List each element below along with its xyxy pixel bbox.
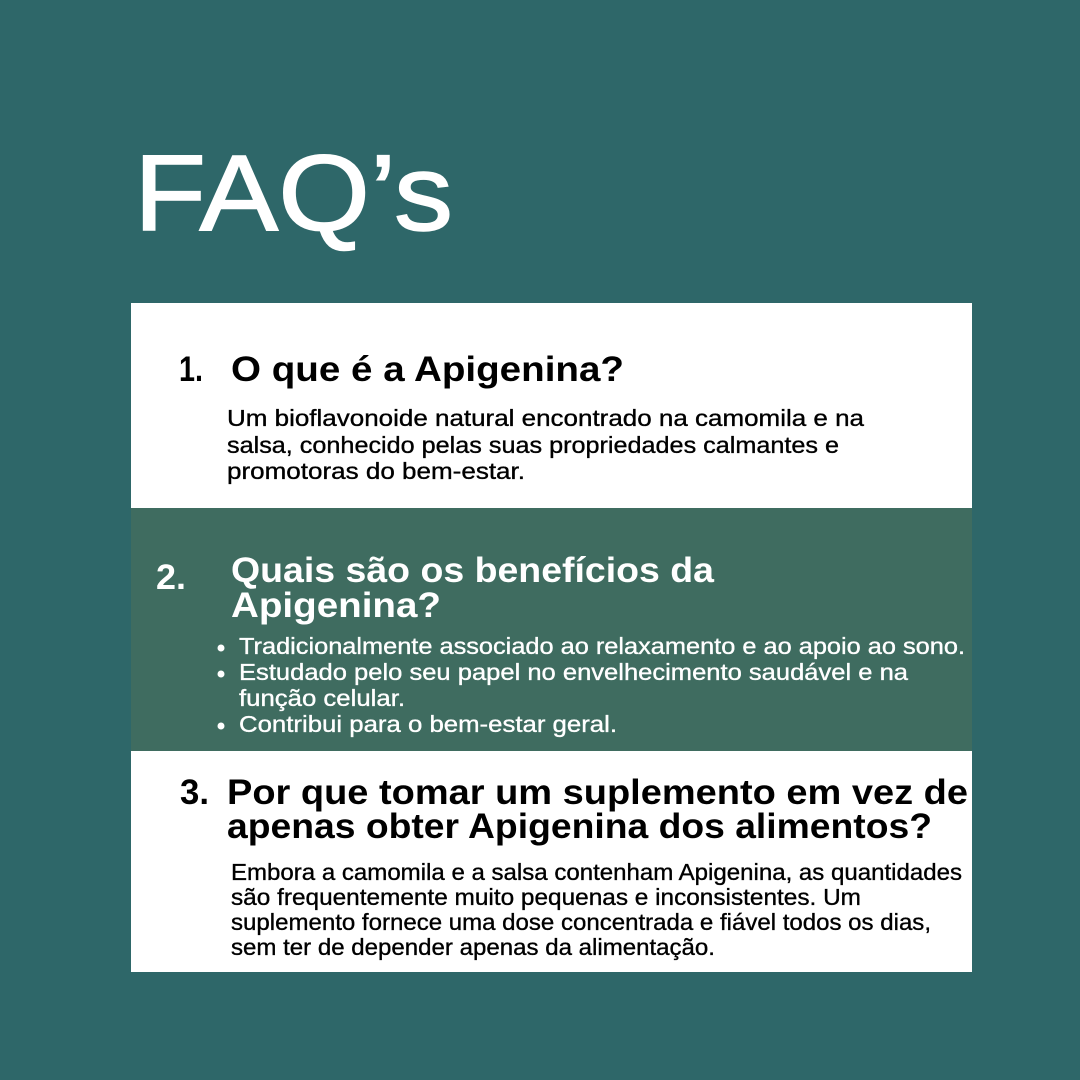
bullet list: benefits: Contribui para o bem-estar geral. xyxy=(239,711,617,737)
heading: question 3: Por que tomar um suplemento em vez de xyxy=(227,773,968,812)
bullet list: benefits xyxy=(218,633,965,737)
bullet list: benefits: Tradicionalmente associado ao relaxamento e ao apoio ao sono. xyxy=(239,633,965,659)
number 2: 2. xyxy=(156,558,186,597)
heading: question 3: apenas obter Apigenina dos alimentos? xyxy=(227,807,932,846)
bullet list: benefits: função celular. xyxy=(239,685,405,711)
text block: answer 3 xyxy=(231,859,962,960)
text block: answer 3: sem ter de depender apenas da alimentação. xyxy=(231,934,715,960)
text block: answer 1: promotoras do bem-estar. xyxy=(227,458,525,484)
text block: answer 1: Um bioflavonoide natural encontrado na camomila e na xyxy=(227,405,864,431)
text block: answer 3: suplemento fornece uma dose concentrada e fiável todos os dias, xyxy=(231,909,931,935)
heading: question 3 xyxy=(227,773,968,846)
text block: answer 3: são frequentemente muito pequenas e inconsistentes. Um xyxy=(231,884,861,910)
number 3: 3. xyxy=(180,773,209,812)
text block: answer 1: salsa, conhecido pelas suas propriedades calmantes e xyxy=(227,432,839,458)
heading: question 1: O que é a Apigenina? xyxy=(231,350,624,389)
heading: question 2: Apigenina? xyxy=(231,586,441,625)
panel: question 2 xyxy=(131,508,972,751)
text block: answer 3: Embora a camomila e a salsa contenham Apigenina, as quantidades xyxy=(231,859,962,885)
number 1: 1. xyxy=(179,350,203,389)
title: FAQ’s xyxy=(134,132,453,253)
panel: question 3 xyxy=(131,751,972,972)
bullet list: benefits: Estudado pelo seu papel no envelhecimento saudável e na xyxy=(239,659,908,685)
text block: answer 1 xyxy=(227,405,864,484)
heading: question 2 xyxy=(231,551,715,625)
panel: question 1 xyxy=(131,303,972,508)
heading: question 2: Quais são os benefícios da xyxy=(231,551,715,590)
